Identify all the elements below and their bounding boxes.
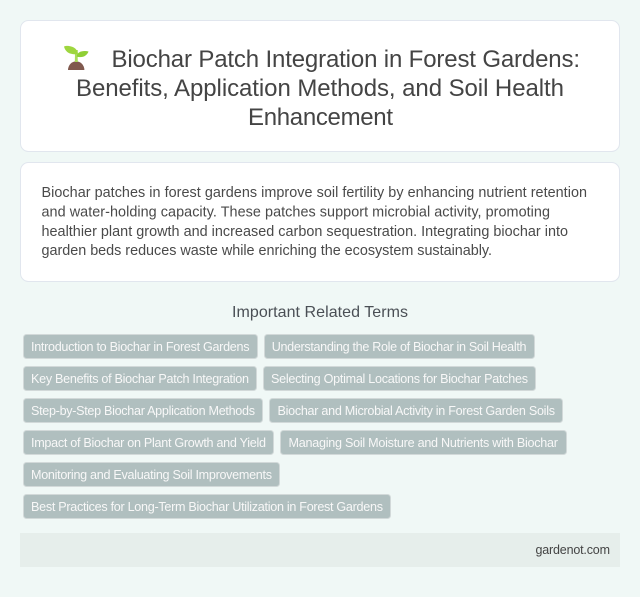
- text block: description: and water-holding capacity. These patches support microbial activity, promoting: [42, 204, 550, 220]
- tag: [24, 462, 280, 486]
- tag: [24, 398, 262, 422]
- tag: [24, 366, 256, 390]
- tag: [24, 430, 274, 454]
- tag: Managing Soil Moisture and Nutrients with Biochar: [288, 436, 558, 450]
- tag: Selecting Optimal Locations for Biochar Patches: [271, 372, 528, 386]
- tag: Biochar and Microbial Activity in Forest Garden Soils: [278, 404, 555, 418]
- heading: important related terms: Important Related Terms: [232, 304, 408, 321]
- tag: [264, 334, 534, 358]
- panel: title card: [20, 20, 620, 152]
- title: Enhancement: [248, 104, 393, 131]
- text block: description: healthier plant growth and increased carbon sequestration. Integrating biochar into: [42, 224, 568, 240]
- tag: Impact of Biochar on Plant Growth and Yield: [31, 436, 266, 450]
- tag list: [24, 334, 566, 518]
- tag: Step-by-Step Biochar Application Methods: [31, 404, 255, 418]
- footer: [20, 533, 620, 567]
- panel: description: [20, 162, 620, 282]
- title: Biochar Patch Integration in Forest Gardens:: [112, 46, 580, 73]
- title: Benefits, Application Methods, and Soil Health: [76, 75, 564, 102]
- tag: Introduction to Biochar in Forest Gardens: [31, 340, 250, 354]
- tag: Best Practices for Long-Term Biochar Utilization in Forest Gardens: [31, 500, 383, 514]
- tag: Understanding the Role of Biochar in Soil Health: [272, 340, 526, 354]
- text block: description: garden beds reduces waste while enriching the ecosystem sustainably.: [42, 243, 492, 259]
- tag: [24, 334, 258, 358]
- tag: Key Benefits of Biochar Patch Integration: [31, 372, 249, 386]
- tag: [280, 430, 566, 454]
- tag: [24, 494, 390, 518]
- tag: [264, 366, 536, 390]
- tag: [270, 398, 562, 422]
- title: [76, 46, 580, 131]
- icon: seedling: [64, 46, 88, 70]
- text block: description: [42, 185, 587, 259]
- tag: Monitoring and Evaluating Soil Improvements: [31, 468, 272, 482]
- footer source text: gardenot.com: [536, 543, 610, 557]
- text block: description: Biochar patches in forest gardens improve soil fertility by enhancing nutrient retention: [42, 185, 587, 201]
